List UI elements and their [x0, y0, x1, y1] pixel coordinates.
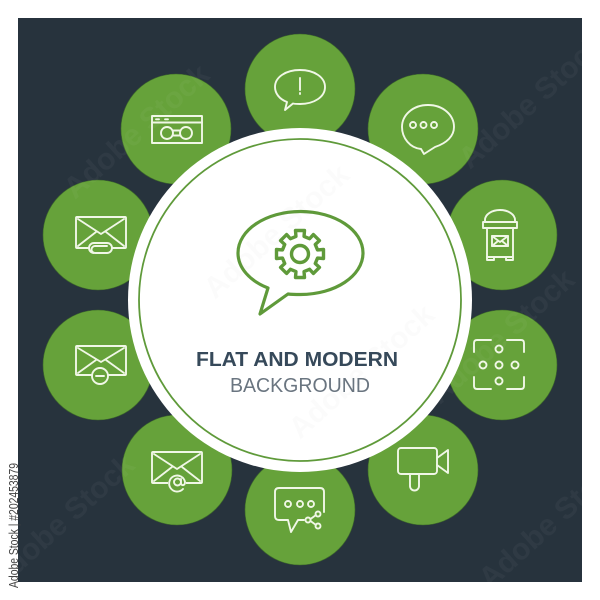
- icon: chat bubble with share symbol: [275, 488, 324, 532]
- icon: envelope with at sign: [152, 452, 202, 492]
- green circles ring: [43, 34, 557, 565]
- icon: envelope with paperclip: [76, 217, 126, 253]
- subheading: BACKGROUND: [230, 375, 370, 397]
- icon: speech bubble with exclamation: [275, 70, 325, 110]
- watermarks: Adobe Stock: [423, 263, 581, 410]
- icon: envelope with minus: [76, 346, 126, 384]
- icon: round chat bubble with dots: [402, 105, 454, 154]
- icon: video camera: [398, 448, 448, 490]
- icon: focus frame with dots: [474, 340, 524, 389]
- icon: cassette tape: [152, 116, 202, 143]
- icon: mailbox: [483, 210, 517, 260]
- watermarks: Adobe Stock: [58, 58, 216, 205]
- central green ring: [139, 139, 461, 461]
- central white circle: [128, 128, 472, 472]
- heading: FLAT AND MODERN: [196, 349, 398, 371]
- stock credit: Adobe Stock | #202453879: [6, 463, 21, 588]
- icon: main speech bubble with gear: [238, 212, 363, 314]
